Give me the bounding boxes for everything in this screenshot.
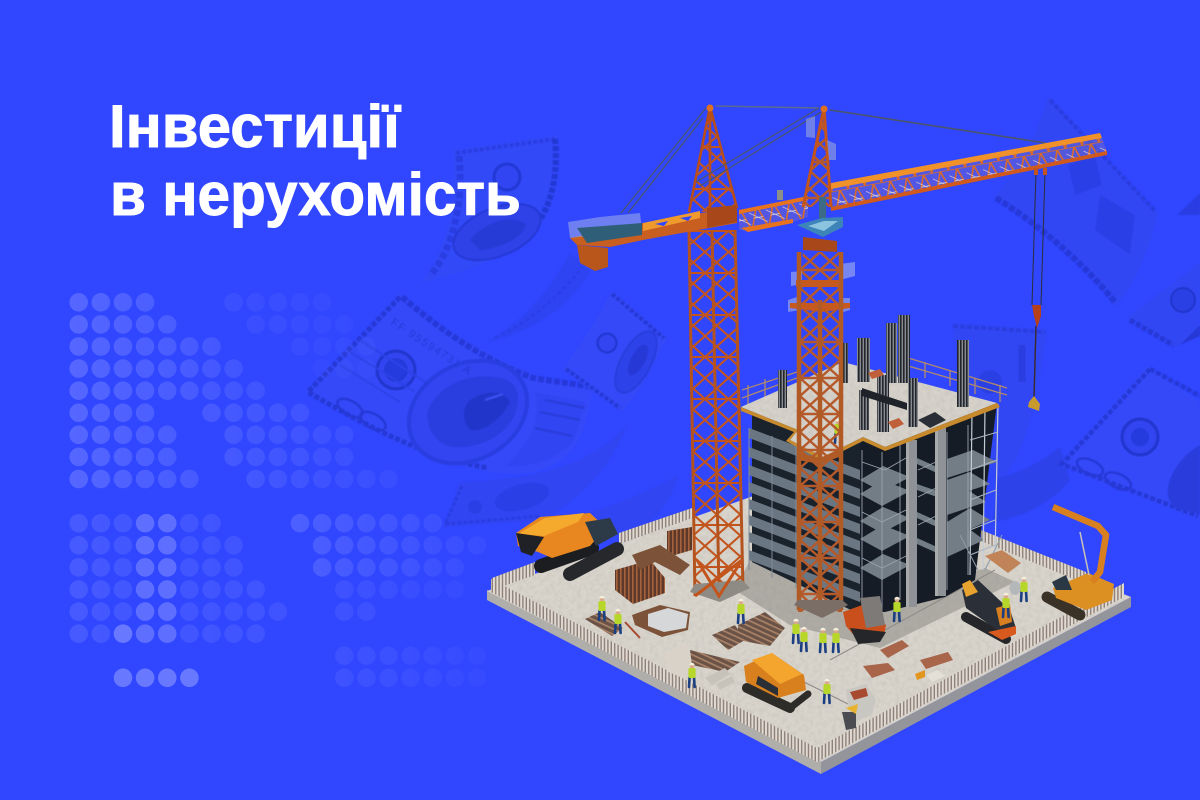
tower collar xyxy=(797,448,842,464)
tower chords xyxy=(689,230,743,596)
small generator xyxy=(915,670,925,680)
A-frame xyxy=(689,107,737,212)
tower lattice xyxy=(689,230,743,592)
crane hook xyxy=(1028,168,1047,411)
white bags stack xyxy=(632,605,690,637)
barrel xyxy=(1010,581,1020,595)
platform top xyxy=(487,474,1131,762)
roof slab xyxy=(741,362,997,457)
tower base xyxy=(690,580,750,602)
small figure on jib xyxy=(777,190,783,200)
brown debris xyxy=(632,545,690,575)
roof dark debris xyxy=(918,412,946,428)
left floors xyxy=(749,428,860,602)
excavator left xyxy=(516,513,618,574)
fence: back right xyxy=(981,530,1086,584)
counter-jib truss holes xyxy=(655,216,692,226)
bill: big center: FF 95594731 A xyxy=(388,316,474,378)
left wing rail lines xyxy=(749,428,842,608)
workers xyxy=(598,577,1028,703)
counter-jib yellow truss xyxy=(643,211,700,231)
platform side faces xyxy=(487,590,821,774)
fence: back left near xyxy=(492,562,535,590)
slewing column xyxy=(819,197,826,222)
crane two mast head xyxy=(797,106,843,252)
wood trestle xyxy=(985,550,1021,573)
tower base xyxy=(794,600,848,618)
right wing floor diamonds xyxy=(860,450,997,580)
crane one tower xyxy=(689,104,750,602)
right support legs xyxy=(960,535,1002,570)
machinery box xyxy=(577,223,642,243)
fence: front right xyxy=(817,583,1124,762)
machinery railing xyxy=(568,213,642,238)
money bills background xyxy=(305,97,1200,535)
dots: bottom right rows xyxy=(344,656,478,678)
right wing frames xyxy=(862,425,968,612)
counterweight block xyxy=(577,245,608,271)
cables xyxy=(621,106,1046,213)
roof rebar columns xyxy=(778,315,969,432)
bill: right lower xyxy=(1058,365,1200,520)
main jib bottom chord xyxy=(831,151,1107,211)
crane cab xyxy=(797,217,843,237)
site equipment xyxy=(516,507,1114,730)
bill: right center xyxy=(953,323,1070,522)
bill: big center xyxy=(305,293,593,483)
timber frame tall xyxy=(667,527,692,555)
ground marks xyxy=(770,570,995,710)
building under construction xyxy=(741,315,1007,612)
planks xyxy=(625,622,640,638)
bill: corner fragment xyxy=(1177,193,1200,215)
lower tower lattice xyxy=(798,310,842,612)
bill: top xyxy=(420,135,559,283)
main jib top chord xyxy=(831,133,1102,189)
upper tower xyxy=(797,252,842,303)
right scaffolding xyxy=(970,404,998,575)
dots: top left block xyxy=(79,302,256,479)
A-frame two xyxy=(803,108,831,207)
dots: lower left block xyxy=(79,523,278,634)
concrete columns xyxy=(906,427,946,607)
crawler machine xyxy=(962,580,1016,640)
platforms xyxy=(788,262,855,313)
dots: lower right block xyxy=(300,523,478,612)
bill: right edge top xyxy=(1127,262,1200,348)
center timber stack xyxy=(738,612,785,646)
tower chords xyxy=(799,252,841,612)
rebar pile left xyxy=(585,612,623,636)
mid jib section xyxy=(739,198,808,231)
roof orange patches xyxy=(868,369,904,429)
rebar cage xyxy=(615,560,665,604)
concrete blocks xyxy=(926,670,945,682)
roof worker xyxy=(834,419,842,443)
excavator right xyxy=(1047,507,1114,615)
dots: top center block xyxy=(212,302,389,479)
left lower stack xyxy=(664,642,695,678)
building left interior xyxy=(752,415,885,612)
roof slab edge xyxy=(741,403,1000,461)
glass side panels xyxy=(806,116,836,160)
bill: small right xyxy=(562,290,667,412)
bill: top right xyxy=(993,97,1158,307)
building materials xyxy=(585,527,1021,690)
title: Інвестиції xyxy=(109,93,401,160)
small machine near workers xyxy=(843,604,886,644)
counter-jib beam xyxy=(570,207,737,247)
title: в нерухомість xyxy=(110,161,521,228)
planks right xyxy=(880,640,909,658)
generator xyxy=(842,684,876,730)
dot matrix pattern xyxy=(79,302,477,678)
rebar cage by building xyxy=(860,596,885,628)
ground shadows xyxy=(735,560,1015,648)
crane jib and counter-jib xyxy=(568,133,1107,271)
bill: curved strip xyxy=(487,253,590,342)
crane two tower xyxy=(788,252,855,618)
main jib truss xyxy=(831,135,1107,210)
roof dark rebar bundle xyxy=(862,388,907,410)
slewing ring xyxy=(803,237,837,252)
dots: bottom bright row xyxy=(123,668,190,687)
bulldozer center xyxy=(744,653,808,708)
slewing block xyxy=(707,205,737,228)
construction site platform xyxy=(487,474,1131,774)
title xyxy=(109,93,521,228)
roof railings xyxy=(742,357,1007,406)
bill: lower curved xyxy=(443,423,678,535)
fence: back left far xyxy=(619,507,695,544)
dots: lower left highlight xyxy=(114,624,133,643)
fence: front left xyxy=(491,579,817,762)
building right interior xyxy=(860,403,997,612)
